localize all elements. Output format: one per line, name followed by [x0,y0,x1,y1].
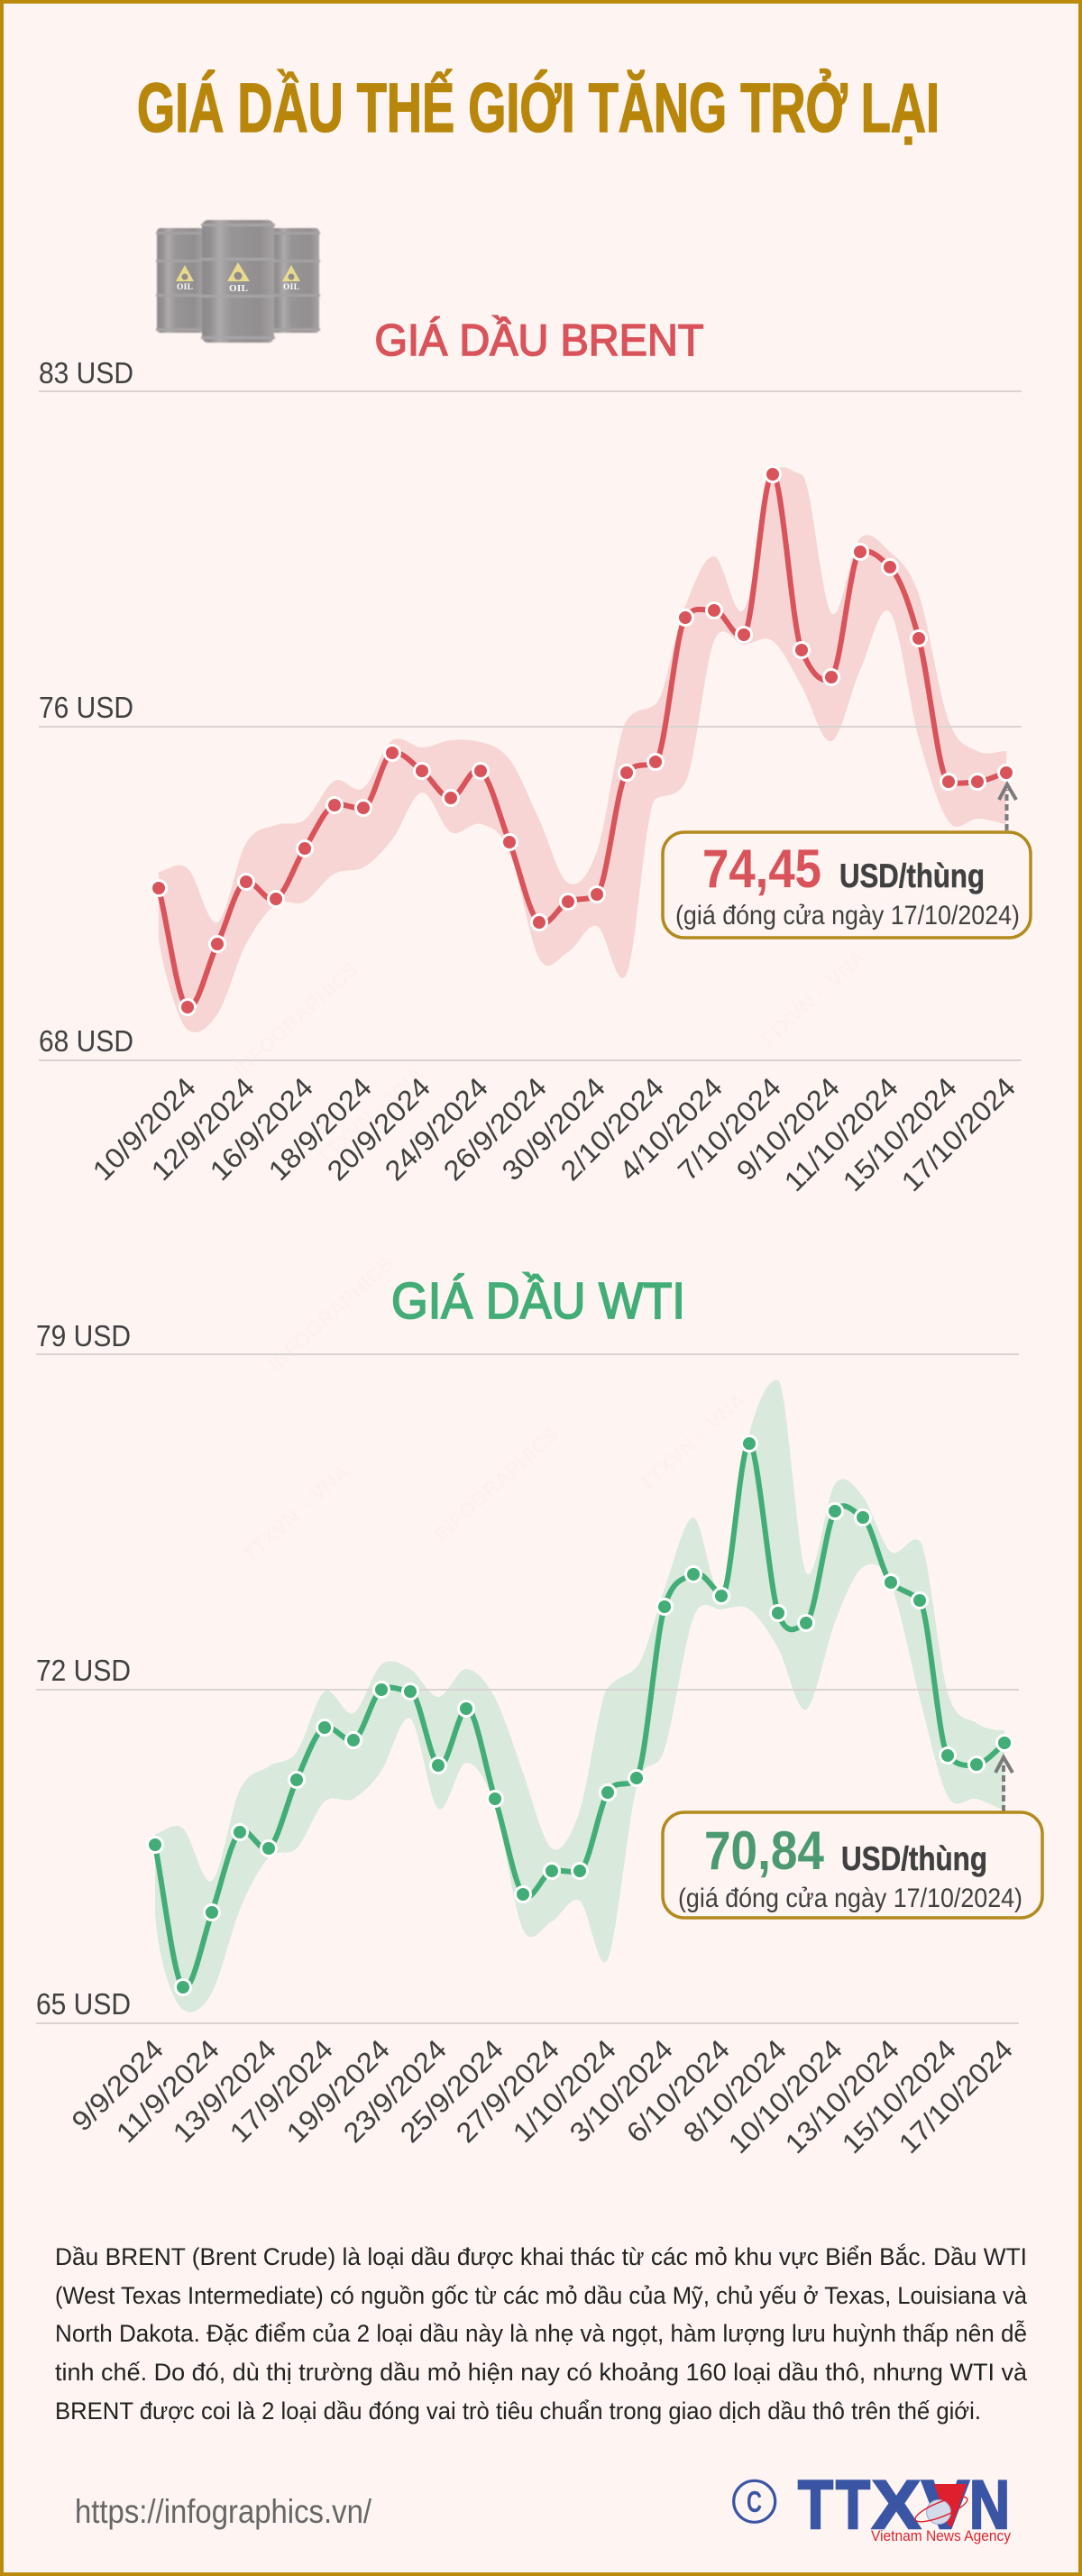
y axis labels: WTI: 79 USD [36,1319,131,1352]
arrow: WTI closing price [995,1757,1013,1811]
WTI price line [155,1444,1004,1988]
logo: TTXVN: T [798,2467,833,2544]
logo: TTXVN: Vietnam News Agency [871,2527,1011,2544]
x axis date labels: Brent: 10/9/2024 [87,1071,202,1187]
text block: explanation: Dầu BRENT (Brent Crude) là loại dầu được khai thác từ các mỏ khu vực Biển Bắc. Dầu WTI [55,2242,1027,2270]
callout: WTI closing price: USD/thùng [841,1840,987,1877]
y axis labels: Brent: 76 USD [39,691,133,724]
logo: TTXVN: T [836,2467,870,2544]
x axis date labels: WTI [66,2033,1019,2159]
x axis date labels: Brent: 16/9/2024 [204,1071,319,1187]
text: INFOGRAPHICS [263,1251,398,1376]
WTI price band [155,1380,1004,2012]
text: TTXVN – VNA [312,1061,428,1169]
x axis date labels: Brent [87,1071,1022,1197]
x axis date labels: WTI: 25/9/2024 [394,2033,509,2149]
x axis date labels: Brent: 4/10/2024 [613,1071,729,1187]
callout: Brent closing price: 74,45 [702,839,821,899]
callout: WTI closing price: 70,84 [704,1820,825,1881]
text block: explanation: tinh chế. Do đó, dù thị trường dầu mỏ hiện nay có khoảng 160 loại dầu thô, nhưng WTI và [55,2359,1028,2386]
callout: Brent closing price: USD/thùng [839,857,985,894]
x axis date labels: Brent: 18/9/2024 [262,1071,378,1187]
text: TTXVN – VNA [237,1459,353,1567]
logo: copyright mark [734,2480,775,2522]
x axis date labels: WTI: 9/9/2024 [66,2033,170,2137]
logo: TTXVN: N [969,2467,1010,2544]
x axis date labels: WTI: 19/9/2024 [280,2033,396,2149]
x axis date labels: Brent: 15/10/2024 [837,1071,963,1197]
x axis date labels: Brent: 9/10/2024 [730,1071,846,1187]
icon: oil barrels: OIL [229,283,248,294]
arrow: Brent closing price [999,784,1016,830]
x axis date labels: WTI: 1/10/2024 [507,2033,622,2149]
y axis labels: WTI: 72 USD [36,1654,131,1687]
x axis date labels: Brent: 7/10/2024 [672,1071,787,1187]
text: INFOGRAPHICS [428,1422,563,1546]
text: INFOGRAPHICS [228,957,362,1081]
icon: oil barrels [156,220,320,343]
y axis labels: WTI: 65 USD [36,1987,131,2021]
x axis date labels: WTI: 10/10/2024 [722,2033,848,2159]
callout: WTI closing price [663,1812,1042,1918]
x axis date labels: Brent: 20/9/2024 [321,1071,436,1187]
x axis date labels: Brent: 30/9/2024 [496,1071,611,1187]
x axis date labels: WTI: 8/10/2024 [677,2033,793,2149]
y axis labels: Brent: 83 USD [39,356,133,390]
logo: TTXVN [798,2467,1011,2544]
source url: https://infographics.vn/ [75,2493,372,2530]
logo: TTXVN: V [922,2467,969,2544]
Brent price band [159,467,1006,1032]
x axis date labels: WTI: 27/9/2024 [450,2033,565,2149]
callout: Brent closing price [663,832,1031,938]
x axis date labels: WTI: 11/9/2024 [110,2033,225,2149]
x axis date labels: WTI: 3/10/2024 [564,2033,679,2149]
callout: WTI closing price: (giá đóng cửa ngày 17/10/2024) [678,1884,1022,1913]
y axis labels: Brent: 68 USD [39,1024,133,1058]
text block: explanation [55,2242,1028,2425]
y axis labels: WTI [36,1319,131,2021]
logo: copyright mark: C [747,2485,762,2518]
panel: WTI chart [36,1271,1042,2159]
x axis date labels: Brent: 24/9/2024 [379,1071,494,1187]
y axis labels: Brent [39,356,133,1058]
text block: explanation: North Dakota. Đặc điểm của 2 loại dầu này là nhẹ và ngọt, hàm lượng lưu huỳnh thấp nên dễ [55,2319,1027,2347]
Brent data points [151,467,1013,1015]
icon: oil barrels: OIL [283,283,299,292]
x axis date labels: WTI: 6/10/2024 [620,2033,736,2149]
logo: TTXVN: X [872,2467,921,2544]
x axis date labels: Brent: 11/10/2024 [778,1071,904,1197]
text block: explanation: (West Texas Intermediate) có nguồn gốc từ các mỏ dầu của Mỹ, chủ yếu ở Texas, Louisiana và [55,2282,1028,2309]
x axis date labels: Brent: 12/9/2024 [145,1071,261,1187]
text: TTXVN – VNA [754,945,870,1053]
heading: Brent: GIÁ DẦU BRENT [375,315,703,365]
heading: WTI: GIÁ DẦU WTI [391,1271,685,1330]
x axis date labels: WTI: 23/9/2024 [337,2033,453,2149]
x axis date labels: Brent: 2/10/2024 [555,1071,670,1187]
WTI data points [148,1435,1012,1994]
x axis date labels: Brent: 17/10/2024 [895,1071,1022,1197]
text: TTXVN – VNA [634,1388,750,1496]
x axis date labels: Brent: 26/9/2024 [437,1071,553,1187]
x axis date labels: WTI: 13/10/2024 [779,2033,905,2159]
Brent price line [159,474,1006,1007]
callout: Brent closing price: (giá đóng cửa ngày 17/10/2024) [675,901,1020,930]
x axis date labels: WTI: 17/9/2024 [224,2033,339,2149]
icon: oil barrels: OIL [177,283,193,292]
x axis date labels: WTI: 15/10/2024 [836,2033,962,2159]
panel: Brent chart [39,315,1031,1197]
x axis date labels: WTI: 17/10/2024 [893,2033,1019,2159]
text block: explanation: BRENT được coi là 2 loại dầu đóng vai trò tiêu chuẩn trong giao dịch dầu thô trên thế giới. [55,2397,981,2425]
x axis date labels: WTI: 13/9/2024 [167,2033,282,2149]
